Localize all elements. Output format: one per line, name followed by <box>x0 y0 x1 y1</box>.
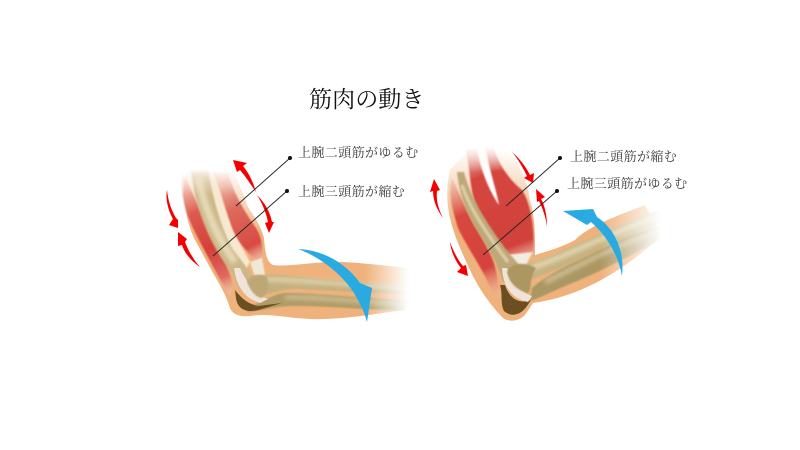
humerus left <box>190 168 253 291</box>
right elbow joint <box>500 264 536 315</box>
right humerus <box>457 172 522 282</box>
right tendon <box>509 251 534 265</box>
right arm illustration <box>430 144 667 321</box>
right leader lines <box>483 156 562 255</box>
left arm illustration <box>166 160 410 322</box>
biceps muscle left <box>214 172 262 262</box>
left arm skin and forearm bones, faded at ends <box>184 172 410 319</box>
right blue arrow <box>563 209 622 276</box>
label: left triceps: 上腕三頭筋が縮む <box>298 184 405 199</box>
left blue arrow <box>298 249 372 322</box>
left forearm lower bone <box>244 293 410 312</box>
left pale region around humerus <box>208 174 250 268</box>
right forearm lower bone <box>530 226 667 301</box>
right muscles and humerus, faded at top <box>450 144 534 298</box>
triceps muscle left <box>182 172 232 295</box>
right arm skin and forearm bones, faded at ends <box>447 148 667 321</box>
left leader lines <box>213 156 292 256</box>
right forearm upper bone <box>526 212 658 280</box>
right arm skin <box>447 148 662 321</box>
elbow joint left <box>234 268 282 311</box>
label: right biceps: 上腕二頭筋が縮む <box>570 149 677 164</box>
right triceps muscle <box>450 178 500 298</box>
left arm skin <box>184 172 410 319</box>
right biceps slit <box>476 144 499 205</box>
left tendon <box>250 258 265 277</box>
title: 筋肉の動き <box>309 87 424 112</box>
right biceps muscle <box>466 146 534 260</box>
left forearm upper bone <box>264 274 400 295</box>
label: right triceps: 上腕三頭筋がゆるむ <box>567 176 688 191</box>
label: left biceps: 上腕二頭筋がゆるむ <box>298 145 419 160</box>
right red arrows <box>430 152 547 276</box>
left red arrows <box>166 160 274 267</box>
left muscles and humerus, faded at top <box>182 168 265 295</box>
